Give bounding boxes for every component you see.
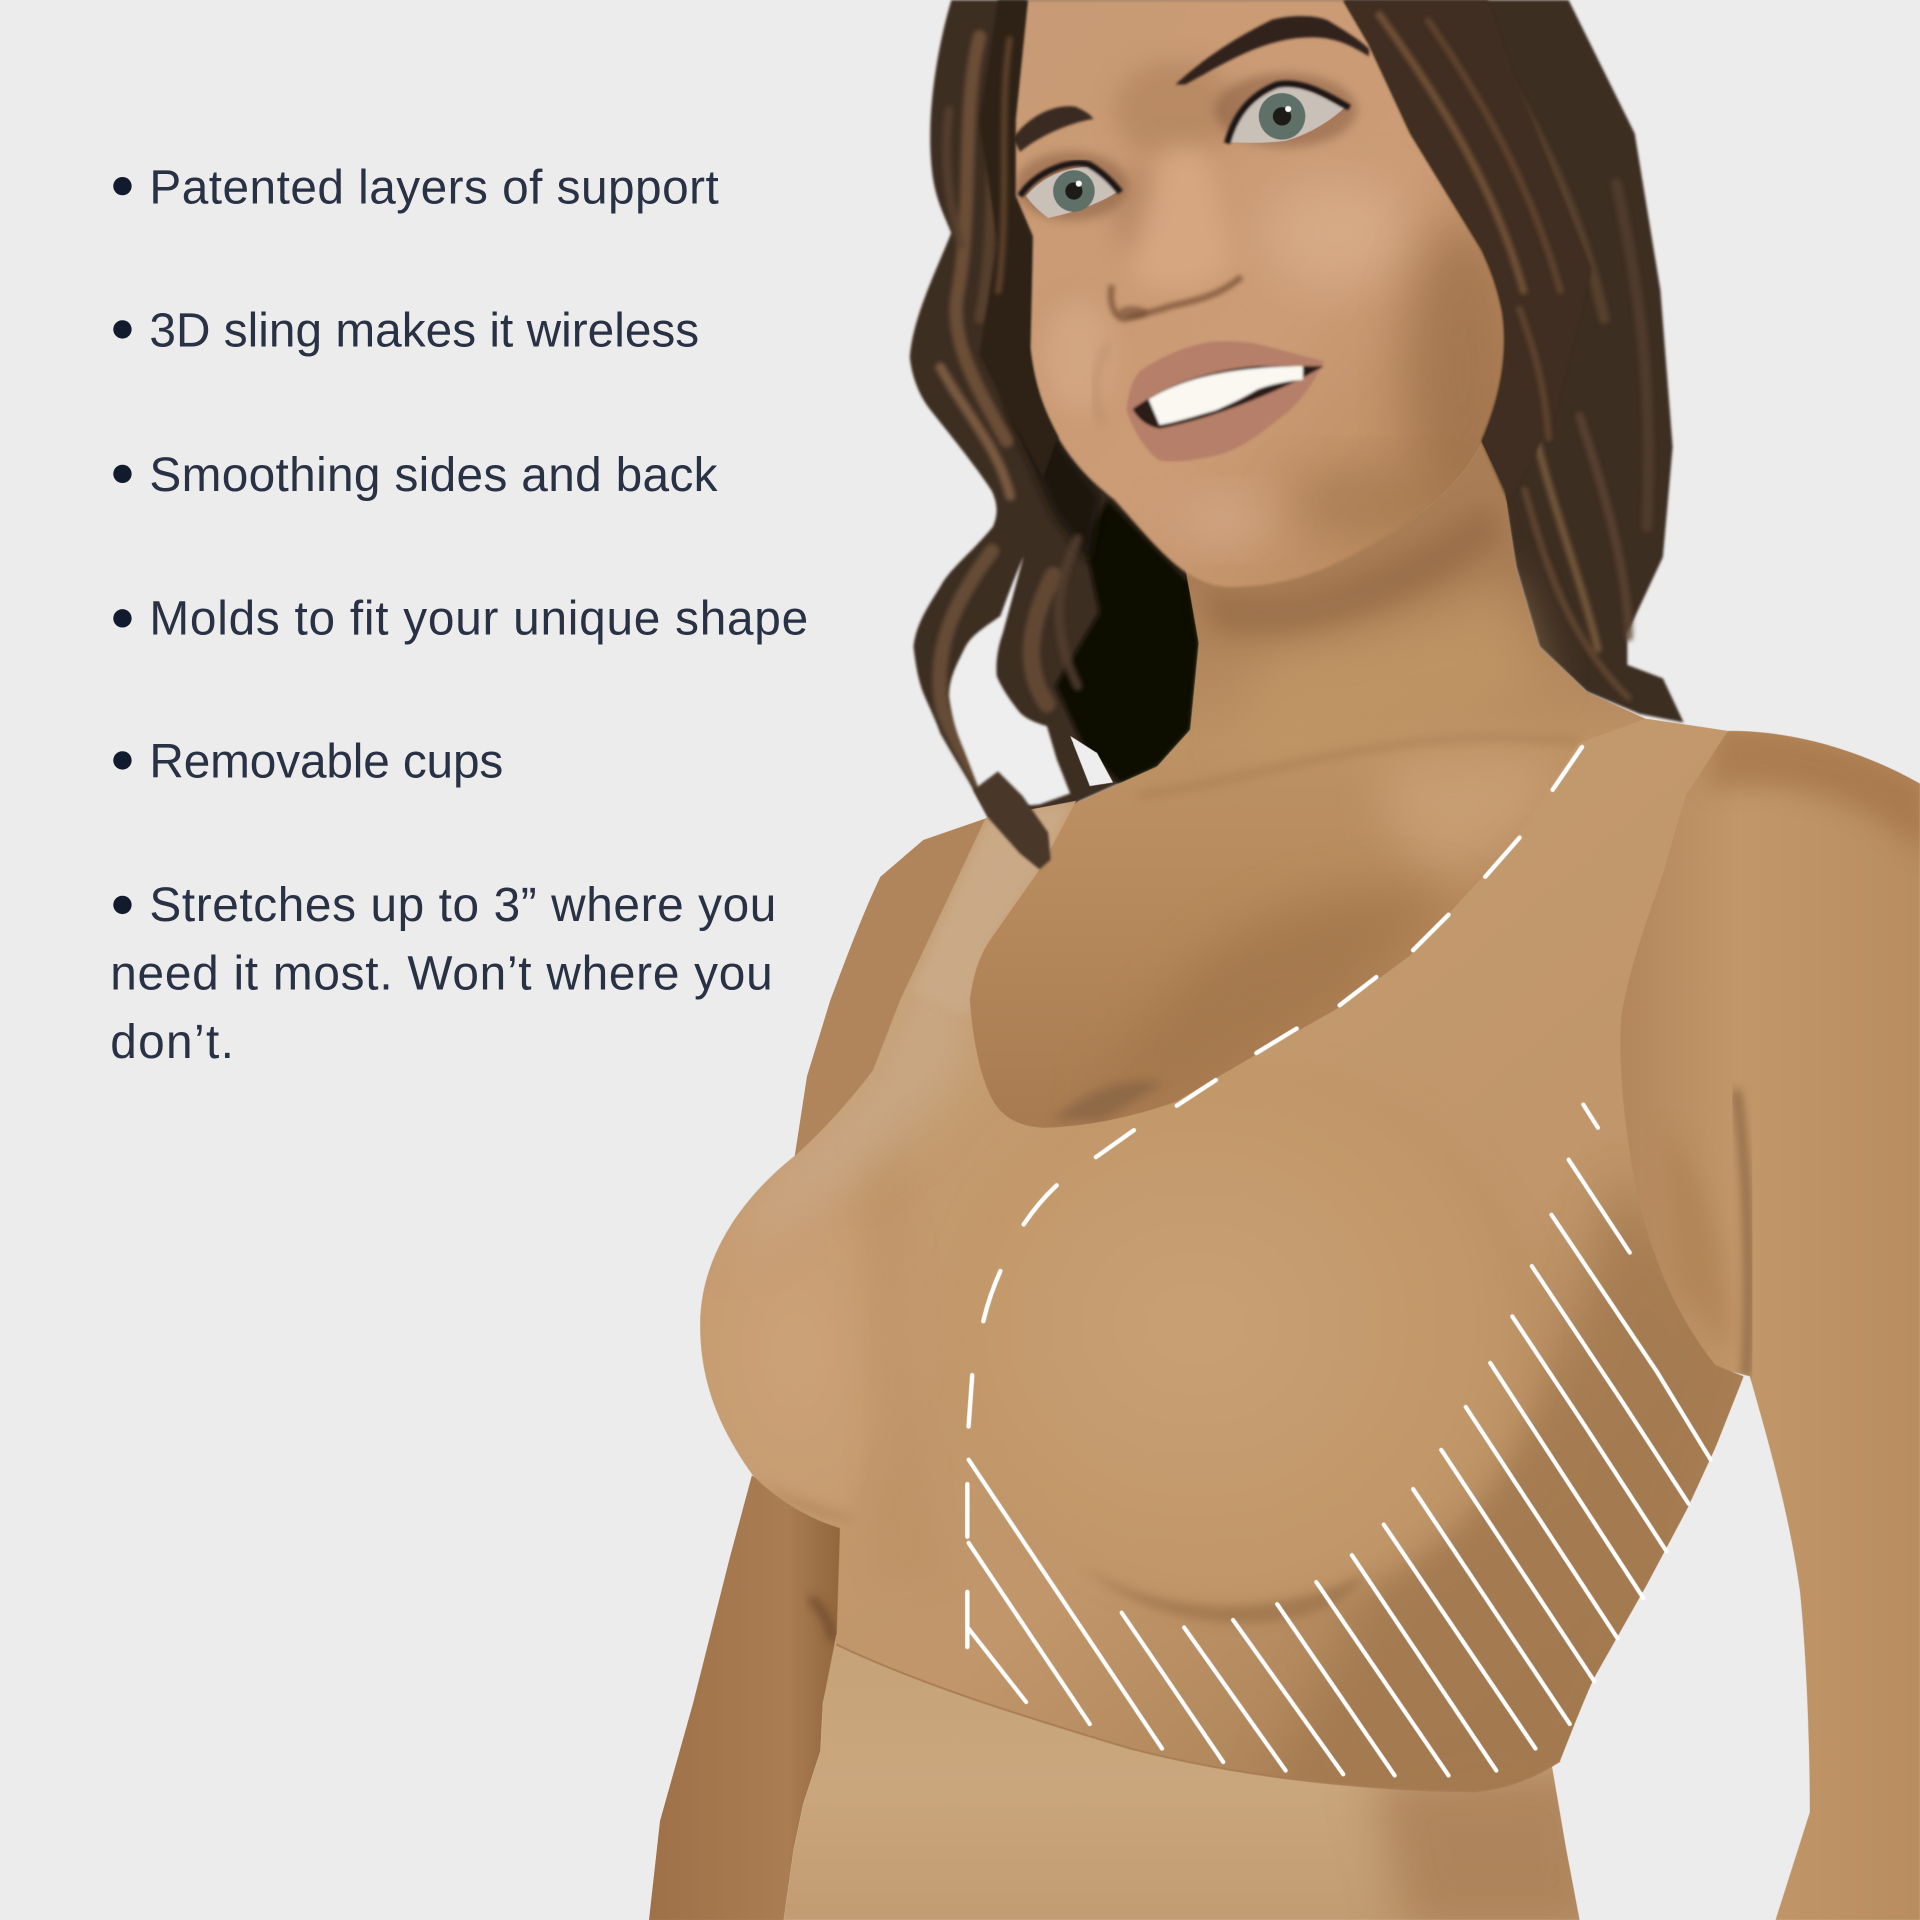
collarbone crease — [1139, 738, 1580, 796]
elbow crease — [811, 1598, 833, 1641]
deep shadow hair under jaw — [1056, 500, 1199, 784]
right eyebrow — [1176, 16, 1369, 84]
torso right shading — [1371, 1763, 1604, 1920]
shoulder top shading — [1705, 730, 1920, 845]
dark hair beside cheek — [998, 245, 1102, 563]
front hair over forehead and cheek sides — [980, 0, 1592, 502]
face — [1013, 0, 1522, 587]
white dashed neckline seam — [967, 747, 1582, 1647]
hair lock over strap — [973, 771, 1051, 869]
centre gore shading — [857, 1078, 943, 1580]
armpit crease — [1736, 1090, 1748, 1376]
neck and chest skin — [955, 416, 1728, 1200]
small background gap near neck — [1070, 736, 1113, 786]
left shoulder and upper arm — [795, 818, 987, 1156]
left cup lower crease — [780, 1494, 840, 1518]
left cup — [700, 1156, 855, 1476]
underarm soft shade — [1676, 1166, 1728, 1332]
mouth — [1127, 341, 1324, 461]
model photo illustration — [649, 0, 1920, 1920]
chest shadows above neckline — [1090, 889, 1457, 1108]
lips — [1127, 341, 1324, 461]
right arm and shoulder — [1592, 722, 1920, 1920]
left eye — [1020, 163, 1120, 218]
right cup — [1194, 1318, 1516, 1590]
hair highlights — [940, 24, 1648, 845]
white diagonal hatch lines — [969, 1104, 1711, 1776]
nose base — [1111, 277, 1242, 319]
side band shadow — [1298, 1196, 1744, 1782]
hem — [836, 1644, 1560, 1791]
cleavage crease — [1053, 1081, 1163, 1120]
background gap between hair locks — [949, 556, 1070, 809]
left lower arm — [649, 1476, 845, 1920]
right eye — [1227, 83, 1349, 143]
torso below bra — [784, 1635, 1604, 1920]
feature: 3D sling: 3D sling makes it wireless — [149, 305, 699, 358]
feature: stretches: need it most. Won’t where you — [110, 947, 773, 1000]
lower cup crease — [1105, 1577, 1360, 1625]
feature: molds to fit: Molds to fit your unique shape — [149, 592, 808, 645]
chin shadow on neck — [1206, 502, 1500, 635]
feature: stretches: Stretches up to 3” where you — [149, 879, 776, 932]
right eye socket shadow — [1215, 73, 1357, 147]
feature: stretches: don’t. — [110, 1016, 234, 1069]
list of product features — [110, 161, 808, 1069]
feature: removable cups: Removable cups — [149, 736, 503, 789]
bra garment — [673, 719, 1763, 1812]
clavicle highlights — [1237, 576, 1561, 882]
feature: stretches — [110, 879, 776, 1069]
feature: patented layers: Patented layers of support — [149, 161, 719, 214]
hair back layer — [910, 0, 1684, 869]
left eyebrow — [1013, 106, 1093, 152]
strap crisp tint — [912, 803, 1071, 1016]
nose highlight — [1134, 142, 1220, 283]
left eye socket shadow — [1015, 152, 1128, 220]
teeth — [1149, 366, 1303, 425]
feature: smoothing: Smoothing sides and back — [149, 449, 718, 502]
pale strap and bust top — [764, 837, 978, 1218]
mouth interior — [1133, 366, 1324, 429]
smile crease — [1094, 351, 1105, 398]
